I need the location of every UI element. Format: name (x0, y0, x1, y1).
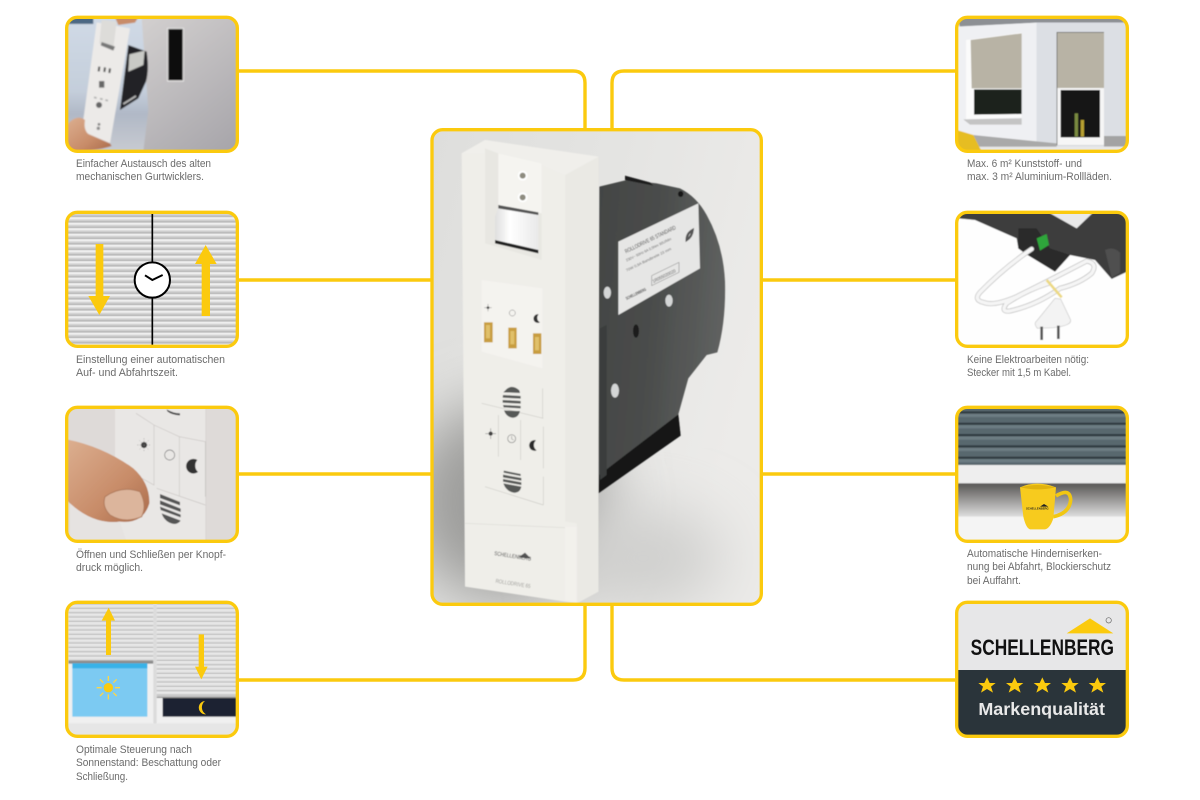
arrow: down (195, 634, 208, 679)
motor label: 1R055020020 (652, 268, 677, 284)
caption: plug (967, 354, 1089, 379)
caption: timer (76, 354, 225, 379)
stone base (973, 134, 1057, 148)
finger (67, 439, 149, 522)
icon: sun (97, 676, 120, 699)
left window (966, 33, 1022, 119)
caption: sun position: Sonnenstand: Beschattung oder (76, 757, 221, 769)
caption: replacement (76, 158, 211, 183)
stars (978, 677, 1106, 693)
brand on device (518, 553, 531, 559)
caption: plug: Stecker mit 1,5 m Kabel. (967, 367, 1071, 379)
switch panel (482, 280, 542, 368)
caption: obstacle detection: Automatische Hinderniserken- (967, 548, 1102, 560)
plug (1035, 298, 1071, 328)
connector lines (238, 71, 957, 680)
caption: button: Öffnen und Schließen per Knopf- (76, 549, 226, 561)
panel: central product photo (407, 125, 770, 610)
motor label: ROLLODRIVE 65 STANDARD (624, 225, 677, 255)
clock divider (152, 214, 154, 345)
caption: obstacle detection: nung bei Abfahrt, Blockierschutz (967, 561, 1111, 573)
right window (1057, 32, 1104, 145)
caption: shutters: Max. 6 m² Kunststoff- und (967, 158, 1082, 170)
green connector (1037, 234, 1049, 251)
panel: finger pressing button (67, 407, 237, 541)
caption: sun position: Schließung. (76, 771, 128, 783)
panel: timer illustration (67, 212, 237, 346)
cable shadow (977, 249, 1094, 311)
panel: central product photo: SCHELLENBERG (494, 551, 531, 563)
caption: replacement: mechanischen Gurtwicklers. (76, 171, 204, 183)
icon: mug: SCHELLENBERG (1026, 506, 1049, 510)
icon: mug (1020, 484, 1071, 529)
caption: sun position: Optimale Steuerung nach (76, 744, 192, 756)
caption: obstacle detection: bei Auffahrt. (967, 575, 1021, 587)
caption: button: druck möglich. (76, 562, 143, 574)
icon: moon (199, 701, 206, 714)
logo roof (1067, 618, 1113, 633)
panel: plug and cable (957, 212, 1127, 346)
caption: shutters (967, 158, 1112, 183)
panel: brand quality badge (957, 602, 1127, 737)
arrow: down (88, 244, 110, 315)
caption: shutters: max. 3 m² Aluminium-Rollläden. (967, 171, 1112, 183)
caption: obstacle detection (967, 548, 1111, 587)
panel: sun position illustration (67, 602, 237, 737)
icon: clock (135, 262, 170, 298)
cable (977, 249, 1094, 311)
caption: button (76, 549, 226, 574)
arrow: up (195, 245, 217, 316)
motor label (618, 203, 700, 315)
caption: sun position (76, 744, 221, 783)
panel: mug under shutter (957, 407, 1127, 541)
panel: replacement photo (67, 17, 237, 151)
logo text: SCHELLENBERG (971, 635, 1114, 660)
caption: timer: Einstellung einer automatischen (76, 354, 225, 366)
caption: replacement: Einfacher Austausch des alten (76, 158, 211, 170)
motor label: 70W 0,9A Bandbreite 23 mm (625, 247, 672, 273)
motor label: 230V~ 50Hz 6A 0,5Nm 90U/Min (625, 237, 672, 263)
caption: plug: Keine Elektroarbeiten nötig: (967, 354, 1089, 366)
screws (604, 191, 683, 398)
arrow: up (102, 608, 115, 655)
panel: central product photo: ROLLODRIVE 65 (495, 579, 531, 590)
caption: timer: Auf- und Abfahrtszeit. (76, 367, 178, 379)
buttons (482, 388, 543, 505)
motor label: SCHELLENBERG (625, 287, 647, 301)
device body (462, 140, 598, 603)
panel: house with shutters (957, 17, 1127, 151)
badge text: Markenqualität (978, 699, 1105, 719)
recess, slider and roller (485, 148, 542, 260)
motor housing (598, 180, 725, 493)
yellow corner (957, 130, 982, 151)
